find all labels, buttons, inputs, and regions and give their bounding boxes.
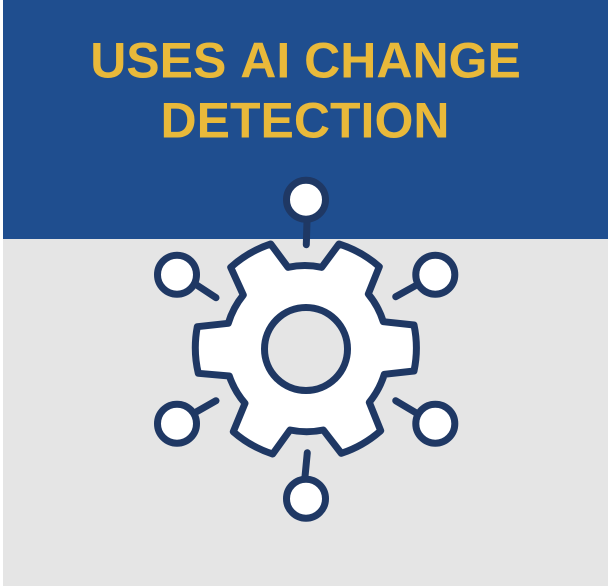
title (90, 32, 521, 148)
node: top (286, 180, 326, 219)
panel: lower gray background (3, 239, 608, 586)
icon: gear body (195, 244, 416, 454)
icon: gear with connected nodes (158, 180, 455, 518)
connector: top (303, 221, 310, 245)
connector: lower right (396, 401, 417, 413)
node: lower right (416, 404, 455, 443)
title: USES AI CHANGE (90, 32, 521, 88)
connector: upper right (396, 285, 417, 297)
connector: bottom (305, 453, 307, 477)
node: bottom (286, 479, 326, 518)
panel: header blue background (3, 0, 608, 239)
title: DETECTION (161, 92, 449, 148)
node: lower left (158, 404, 196, 443)
node: upper left (158, 255, 196, 294)
node: upper right (416, 255, 455, 294)
connector: lower left (197, 401, 216, 412)
icon: gear center hole (264, 308, 348, 390)
connector: upper left (197, 285, 216, 298)
